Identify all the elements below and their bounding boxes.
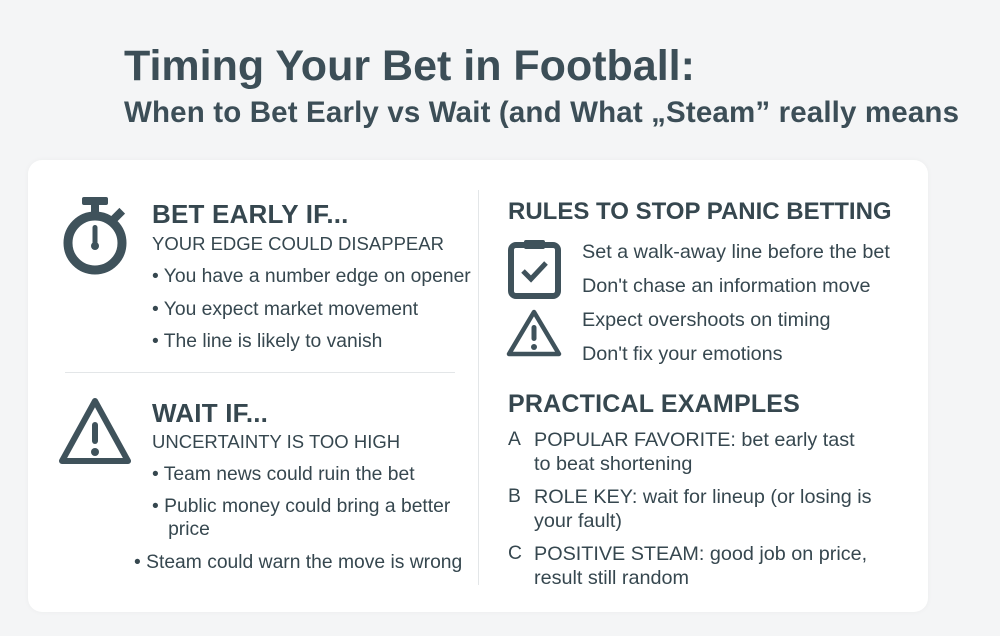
panel: practical examples: POSITIVE STEAM: good job on price, [534,543,867,565]
icon: stopwatch [64,197,126,274]
panel: bet early [64,197,471,352]
icon: clipboard [508,240,561,299]
rules list: Expect overshoots on timing [582,309,830,331]
title: Timing Your Bet in Football: [124,42,695,90]
examples: A [508,429,521,450]
subheading: YOUR EDGE COULD DISAPPEAR [152,233,444,254]
bullets: • You have a number edge on opener [152,266,471,287]
bullets: • Team news could ruin the bet [152,464,415,485]
panel: practical examples: your fault) [534,510,622,532]
bullets: price [168,519,210,540]
icon: warning [59,398,131,464]
heading: BET EARLY IF... [152,199,349,229]
panel: practical examples [508,390,872,589]
rules list: Don't fix your emotions [582,343,783,365]
bullets [152,464,450,540]
panel: practical examples: ROLE KEY: wait for lineup (or losing is [534,486,872,508]
panel: practical examples: to beat shortening [534,453,692,475]
divider vertical [478,190,479,585]
panel: wait: • Steam could warn the move is wrong [134,552,462,573]
examples: B [508,486,521,507]
rules list [582,241,890,365]
examples [508,429,522,564]
main card [28,160,928,612]
bullets: • The line is likely to vanish [152,331,382,352]
panel: wait [59,398,462,573]
icon: warning [506,310,562,356]
rules list: Don't chase an information move [582,275,871,297]
panel: practical examples: POPULAR FAVORITE: bet early tast [534,429,855,451]
heading: RULES TO STOP PANIC BETTING [508,198,892,225]
bullets: • Public money could bring a better [152,496,450,517]
examples: C [508,543,522,564]
bullets: • You expect market movement [152,298,418,320]
panel: rules [506,198,892,365]
heading: WAIT IF... [152,398,268,428]
subtitle: When to Bet Early vs Wait (and What „Steam” really means [124,96,959,129]
bullets [152,266,471,352]
subheading: UNCERTAINTY IS TOO HIGH [152,431,400,452]
heading: PRACTICAL EXAMPLES [508,390,800,418]
panel: practical examples: result still random [534,567,689,589]
rules list: Set a walk-away line before the bet [582,241,890,263]
divider horizontal [65,372,455,373]
